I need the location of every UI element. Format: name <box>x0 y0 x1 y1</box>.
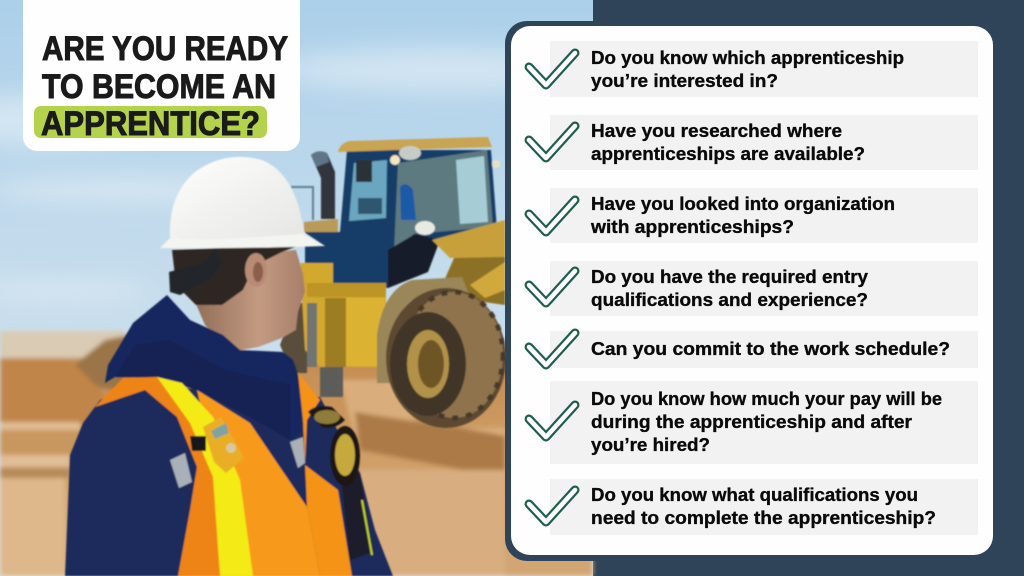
item 7 <box>529 479 978 535</box>
title text <box>41 30 288 143</box>
item 1 <box>529 41 978 97</box>
black vest clip <box>190 436 206 451</box>
ear <box>245 253 267 287</box>
rear deck <box>304 219 338 232</box>
panel: checklist <box>511 26 993 555</box>
wheel loader <box>280 137 506 428</box>
highlight behind apprentice <box>34 106 267 138</box>
worker <box>65 157 393 576</box>
handrail <box>291 187 313 220</box>
icon: check <box>529 333 575 365</box>
icon: check <box>529 53 575 85</box>
front tyre <box>386 288 506 428</box>
icon: check <box>529 405 575 437</box>
cab roof <box>338 137 492 152</box>
photo: construction worker looking at a wheel loader <box>0 0 620 576</box>
item 3: with apprenticeships? <box>590 216 794 237</box>
item 3: Have you looked into organization <box>591 193 895 214</box>
sandy ground <box>0 331 593 576</box>
icon: check <box>529 126 575 158</box>
navy jacket <box>65 385 393 576</box>
item 2: apprenticeships are available? <box>591 143 865 164</box>
neck and face <box>190 250 305 352</box>
jacket shadow side <box>340 470 373 560</box>
item 2: Have you researched where <box>591 120 842 141</box>
item 5 <box>529 331 978 368</box>
reflective yellow stripe <box>157 377 253 576</box>
item 7: Do you know what qualifications you <box>591 484 918 505</box>
helmet strap clip <box>169 248 222 295</box>
gas detector <box>203 417 244 473</box>
sunglasses <box>308 406 345 428</box>
item 7: need to complete the apprenticeship? <box>591 507 936 528</box>
item 6: during the apprenticeship and after <box>591 411 912 432</box>
title text: TO BECOME AN <box>42 68 276 106</box>
panel navy frame <box>505 21 805 561</box>
left orange vest panel <box>95 377 253 576</box>
right orange vest strap <box>298 373 352 576</box>
item 6 <box>529 381 978 464</box>
item 1: you’re interested in? <box>591 70 778 91</box>
item 4: Do you have the required entry <box>591 266 869 287</box>
rear wheel <box>280 303 307 373</box>
yellow chassis <box>300 263 386 367</box>
hood and collar <box>105 295 307 440</box>
item 5: Can you commit to the work schedule? <box>591 338 950 359</box>
lift arms <box>440 240 505 305</box>
item 6: Do you know how much your pay will be <box>591 388 942 409</box>
item 4: qualifications and experience? <box>591 289 868 310</box>
item 6: you’re hired? <box>591 434 710 455</box>
item 1: Do you know which apprenticeship <box>591 47 904 68</box>
cab shadow <box>388 234 440 288</box>
cab body <box>305 150 497 288</box>
cab lamps <box>399 146 421 160</box>
main orange vest panel <box>197 390 320 576</box>
rim <box>407 330 449 398</box>
title text: APPRENTICE? <box>41 105 260 143</box>
icon: check <box>529 490 575 522</box>
icon: check <box>529 271 575 303</box>
item 2 <box>529 115 978 170</box>
white hard hat <box>160 157 325 248</box>
icon: check <box>529 200 575 232</box>
fender <box>377 277 468 383</box>
title card <box>23 0 300 151</box>
item 3 <box>529 188 978 243</box>
exhaust stack <box>311 151 335 219</box>
title text: ARE YOU READY <box>42 30 288 68</box>
grey sleeve patch <box>170 453 192 488</box>
clouds in the sky <box>0 48 620 300</box>
cab windows <box>349 160 387 221</box>
item 4 <box>529 261 978 316</box>
